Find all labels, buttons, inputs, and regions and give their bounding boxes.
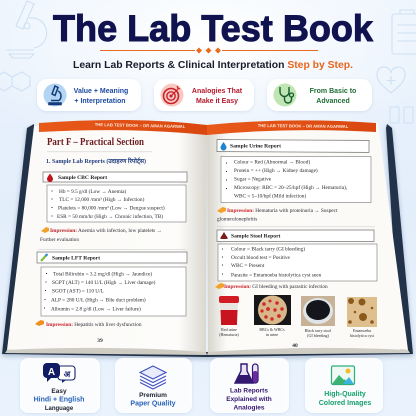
right page header band: THE LAB TEST BOOK – DR AMAN AGARWAL bbox=[258, 123, 349, 129]
icon: language bubbles bbox=[43, 363, 75, 383]
urine impression: Impression: Hematuria with proteinuria → Suspect bbox=[227, 208, 338, 214]
LFT values box: ALP = 280 U/L (High → Bile duct problem) bbox=[51, 296, 146, 304]
feature card: paper quality bbox=[115, 358, 192, 413]
stool values box: Occult blood test = Positive bbox=[231, 255, 291, 261]
feature card: paper quality: Paper Quality bbox=[130, 400, 176, 408]
LFT values box bbox=[41, 267, 186, 316]
feature pill: basic to advanced: Advanced bbox=[316, 98, 350, 105]
stool values box: WBC = Present bbox=[231, 263, 265, 269]
urine values box: Microscopy: RBC = 20–25/hpf (High → Hematuria), bbox=[234, 184, 347, 191]
urine values box: Sugar = Negative bbox=[234, 176, 272, 182]
LFT values box: Albumin = 2.8 g/dl (Low → Liver failure) bbox=[51, 306, 141, 312]
stool impression: Impression: GI bleeding with parasitic infection bbox=[224, 283, 328, 290]
feature pill: analogies: Analogies That bbox=[192, 88, 243, 95]
photo: black tarry stool: (GI bleeding) bbox=[307, 333, 329, 338]
urine values box bbox=[221, 156, 371, 202]
feature pill: basic to advanced bbox=[267, 79, 372, 111]
icon: language bubbles: अ bbox=[64, 369, 71, 379]
photo: red urine cup: Red urine bbox=[221, 327, 237, 332]
icon: stethoscope bbox=[274, 84, 296, 106]
LFT values box: Total Bilirubin = 3.2 mg/dl (High → Jaundice) bbox=[53, 270, 152, 278]
LFT impression: Impression: Hepatitis with liver dysfunction bbox=[46, 321, 142, 328]
urine values box: Protein = ++ (High → Kidney damage) bbox=[234, 167, 318, 174]
icon: picture bbox=[332, 366, 354, 384]
LFT report title box bbox=[37, 252, 187, 263]
urine values box: WBC = 5–10/hpf (Mild infection) bbox=[234, 192, 306, 200]
right page bbox=[207, 120, 408, 352]
page number 39: 39 bbox=[97, 338, 103, 344]
CBC values box: Hb = 9.5 g/dl (Low → Anemia) bbox=[59, 188, 127, 195]
page number 40: 40 bbox=[292, 343, 298, 349]
right page content bbox=[215, 140, 377, 349]
feature card: language: Hindi + English bbox=[34, 396, 84, 404]
urine report title box: Sample Urine Report bbox=[230, 144, 281, 150]
CBC report title box: Sample CBC Report bbox=[58, 175, 107, 181]
stool values box bbox=[218, 244, 377, 281]
feature pill: basic to advanced: From Basic to bbox=[310, 88, 356, 95]
photo: RBCs and WBCs: in urine bbox=[266, 332, 278, 337]
stool report title box bbox=[217, 230, 374, 242]
feature card: paper quality: Premium bbox=[139, 392, 167, 399]
page edge stack bbox=[5, 348, 410, 355]
LFT report title box: Sample LFT Report bbox=[52, 256, 100, 262]
CBC impression bbox=[40, 227, 162, 243]
feature pill: value + meaning: + Interpretation bbox=[74, 98, 126, 105]
photo: entamoeba cysts bbox=[347, 297, 377, 338]
urine values box: Colour = Red (Abnormal → Blood) bbox=[234, 158, 310, 166]
urine report title box bbox=[217, 140, 369, 152]
photo: entamoeba cysts: histolytica cyst bbox=[350, 333, 375, 338]
feature card: language bbox=[20, 358, 100, 413]
feature card: lab reports: Explained with bbox=[226, 396, 272, 403]
photo: RBCs and WBCs: RBCs & WBCs bbox=[259, 327, 285, 332]
subtitle: Learn Lab Reports & Clinical Interpretation Step by Step. bbox=[73, 60, 353, 71]
icon: language bubbles: A bbox=[48, 367, 55, 378]
photo: RBCs and WBCs bbox=[254, 295, 291, 337]
left page header band: THE LAB TEST BOOK – DR AMAN AGARWAL bbox=[95, 122, 186, 129]
CBC report title box bbox=[43, 172, 187, 182]
photo: red urine cup bbox=[219, 296, 239, 337]
CBC values box: TLC = 12,000 /mm³ (High → Infection) bbox=[59, 196, 145, 203]
icon: flask and test tube bbox=[235, 364, 258, 383]
feature card: language: Easy bbox=[51, 388, 67, 395]
left page bbox=[7, 121, 207, 352]
urine impression: glomerulonephritis bbox=[217, 216, 257, 222]
feature pill: analogies bbox=[154, 79, 254, 111]
left page header band bbox=[39, 120, 207, 135]
open book bbox=[2, 120, 413, 357]
feature card: colored images: Colored Images bbox=[319, 400, 371, 407]
icon: paper stack bbox=[140, 366, 166, 389]
stool report title box: Sample Stool Report bbox=[231, 234, 281, 240]
feature card: lab reports: Analogies bbox=[233, 404, 265, 412]
feature card: lab reports bbox=[210, 358, 289, 413]
right page header band bbox=[207, 120, 376, 135]
feature card: lab reports: Lab Reports bbox=[230, 388, 268, 394]
left page content bbox=[35, 137, 187, 344]
title: The Lab Test Book bbox=[53, 8, 373, 49]
feature card: colored images bbox=[305, 358, 383, 413]
title divider ornament bbox=[100, 48, 318, 54]
icon: microscope bbox=[44, 84, 66, 106]
book cover bbox=[2, 124, 413, 357]
icon: target bbox=[160, 84, 184, 106]
stool values box: Colour = Black tarry (GI bleeding) bbox=[231, 246, 305, 252]
LFT impression bbox=[35, 320, 142, 328]
photo: black tarry stool: Black tarry stool bbox=[305, 328, 332, 333]
urine impression bbox=[217, 207, 338, 222]
feature card: language: Language bbox=[45, 406, 74, 412]
CBC values box bbox=[47, 185, 186, 222]
section heading: Part F – Practical Section bbox=[47, 137, 144, 148]
CBC values box: Platelets = 80,000 /mm³ (Low → Dengue suspect) bbox=[58, 204, 165, 212]
LFT values box: SGOT (AST) = 110 U/L bbox=[52, 288, 104, 294]
feature card: colored images: High-Quality bbox=[324, 391, 366, 398]
CBC impression: Impression: Anemia with infection, low platelets → bbox=[50, 227, 162, 234]
feature pill: value + meaning bbox=[37, 79, 141, 111]
CBC values box: ESR = 50 mm/hr (High → Chronic infection, TB) bbox=[57, 213, 163, 220]
feature pill: analogies: Make it Easy bbox=[196, 98, 238, 105]
stool values box: Parasite = Entamoeba histolytica cyst seen bbox=[231, 272, 322, 278]
LFT values box: SGPT (ALT) = 140 U/L (High → Liver damage) bbox=[52, 279, 156, 286]
photo: black tarry stool bbox=[301, 296, 335, 338]
photo: entamoeba cysts: Entamoeba bbox=[353, 328, 371, 333]
sub heading: 1. Sample Lab Reports (उदाहरण रिपोर्ट्स) bbox=[46, 157, 146, 165]
CBC impression: Further evaluation bbox=[40, 237, 79, 243]
feature pill: value + meaning: Value + Meaning bbox=[74, 88, 128, 95]
photo: red urine cup: (Hematuria) bbox=[219, 332, 239, 337]
